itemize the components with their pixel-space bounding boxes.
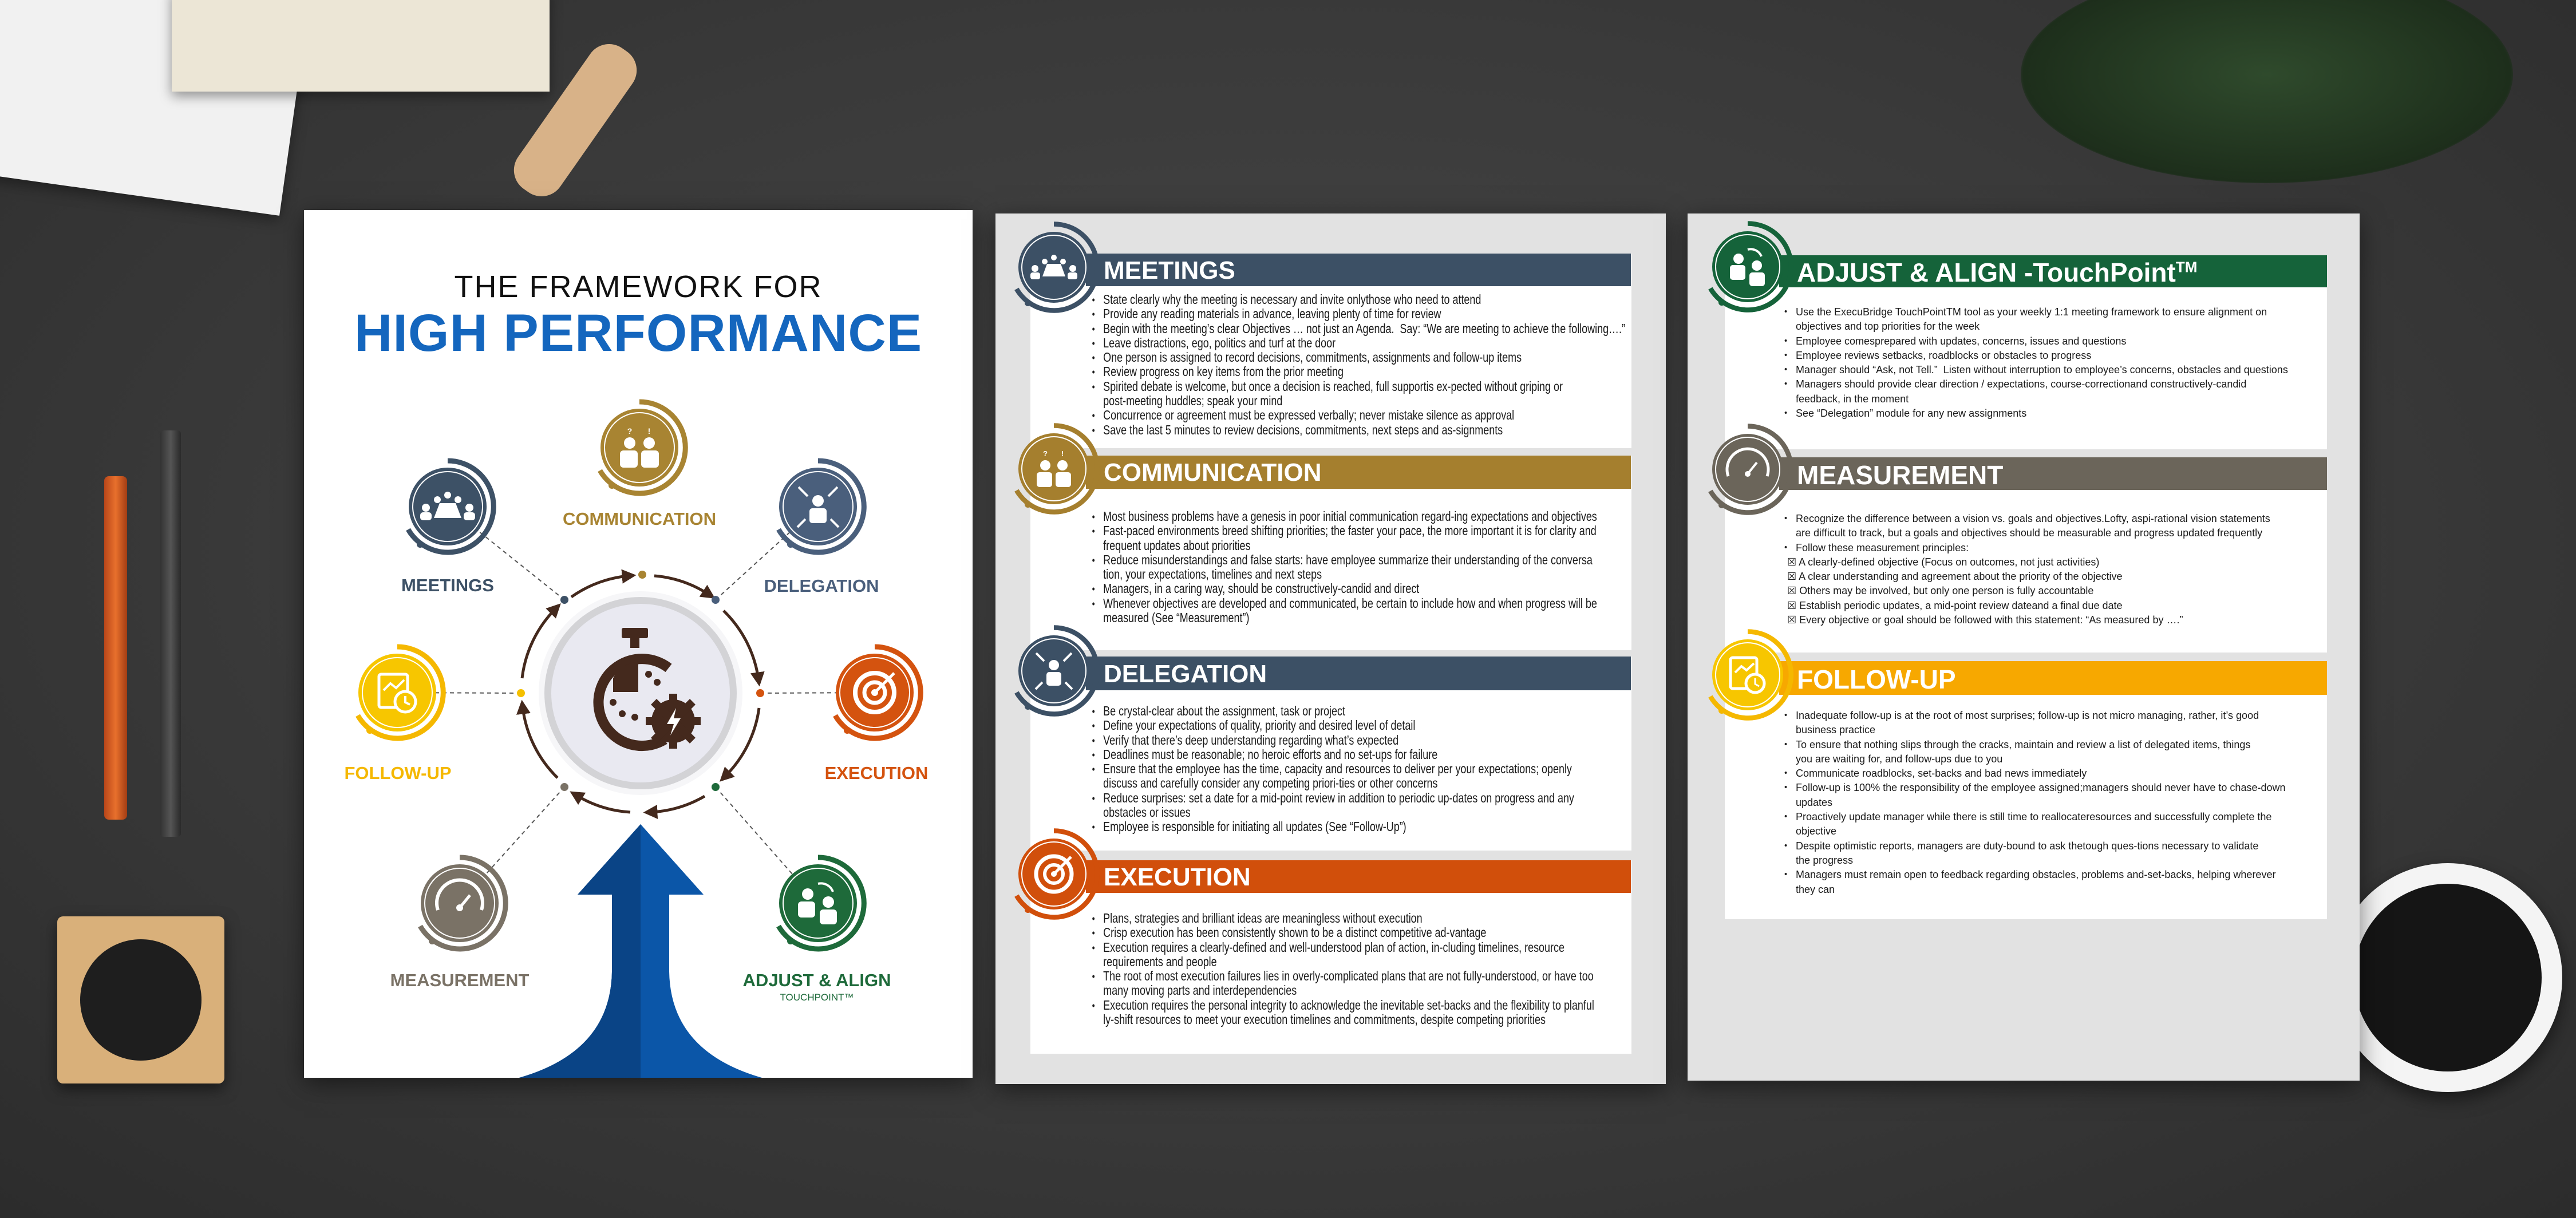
- icon: delegation: [779, 461, 864, 552]
- text: delegation bullets: Employee is responsible for initiating all updates (See “Follow-Up”): [1103, 819, 1406, 834]
- text: delegation bullets: Define your expectations of quality, priority and desired level of detail: [1103, 718, 1415, 733]
- text: meetings bullets: Spirited debate is welcome, but once a decision is reached, full supportis ex-pected without griping or: [1103, 379, 1563, 394]
- decoration: coffee cup: [2333, 863, 2562, 1092]
- icon: communication badge: !: [1061, 449, 1064, 458]
- text: measurement bullets: ☒ Others may be involved, but only one person is fully accountable: [1787, 585, 2093, 596]
- header bar: communication: COMMUNICATION: [1104, 458, 1321, 487]
- text: meetings bullets: [1092, 292, 1625, 437]
- icon: execution badge: [1014, 828, 1098, 920]
- center disc: [539, 591, 742, 795]
- label: delegation: DELEGATION: [764, 576, 879, 596]
- icon: communication: [600, 402, 685, 493]
- label: adjust & align touchpoint: [743, 970, 891, 1003]
- icon: communication: !: [648, 426, 650, 436]
- text: adjust bullets: Manager should “Ask, not Tell.” Listen without interruption to employee’s concerns, obstacles and questions: [1796, 364, 2288, 375]
- text: execution bullets: The root of most execution failures lies in overly-complicated plans that are not fully-understood, or have too: [1103, 968, 1594, 983]
- text: measurement bullets: ☒ A clearly-defined objective (Focus on outcomes, not just activities): [1787, 556, 2099, 568]
- decoration: orange pen: [104, 476, 127, 820]
- blue growth arrow: [519, 824, 762, 1078]
- icon: follow-up badge: [1708, 629, 1793, 721]
- text: adjust bullets: objectives and top priorities for the week: [1796, 321, 1980, 332]
- text: communication bullets: Reduce misunderstandings and false starts: have employee summarize their understanding of the conversa: [1103, 552, 1593, 567]
- text: meetings bullets: Provide any reading materials in advance, leaving plenty of time for review: [1103, 306, 1441, 321]
- text: meetings bullets: post-meeting huddles; speak your mind: [1103, 393, 1282, 408]
- section: follow-up: [1725, 661, 2327, 919]
- icon: follow-up: [358, 647, 443, 738]
- text: measurement bullets: ☒ Every objective or goal should be followed with this statement: “As measured by ….”: [1787, 614, 2183, 626]
- text: meetings bullets: Review progress on key items from the prior meeting: [1103, 364, 1344, 379]
- cycle arrows: [522, 576, 759, 812]
- text: execution bullets: [1092, 911, 1594, 1027]
- text: follow-up bullets: Managers must remain open to feedback regarding obstacles, problems and-set-backs, helping wherever: [1796, 869, 2275, 880]
- text: measurement bullets: ☒ A clear understanding and agreement about the priority of the objective: [1787, 571, 2123, 582]
- text: execution bullets: Plans, strategies and brilliant ideas are meaningless without execution: [1103, 911, 1423, 926]
- ring dots: [517, 571, 764, 791]
- text: meetings bullets: Leave distractions, ego, politics and turf at the door: [1103, 335, 1336, 350]
- text: follow-up bullets: the progress: [1796, 855, 1853, 866]
- icon: meetings: [408, 461, 493, 552]
- text: measurement bullets: are difficult to track, but a goals and objectives should be measurable and progress updated frequently: [1796, 527, 2262, 539]
- header bar: adjust & align: [1779, 255, 2327, 287]
- text: adjust bullets: Employee comesprepared with updates, concerns, issues and questions: [1796, 335, 2126, 347]
- header bar: execution: [1086, 860, 1631, 893]
- icon: measurement badge: [1708, 424, 1792, 515]
- panel: page 1 framework poster: [304, 210, 973, 1078]
- text: adjust bullets: feedback, in the moment: [1796, 393, 1909, 405]
- text: adjust bullets: See “Delegation” module for any new assignments: [1796, 408, 2026, 419]
- text: meetings bullets: Begin with the meeting’s clear Objectives … not just an Agenda. Say: “We are meeting to achieve the following….”: [1103, 321, 1625, 336]
- text: meetings bullets: State clearly why the meeting is necessary and invite onlythose who need to attend: [1103, 292, 1481, 307]
- text: execution bullets: many moving parts and interdependencies: [1103, 983, 1297, 998]
- header bar: execution: EXECUTION: [1104, 863, 1251, 891]
- text: communication bullets: Fast-paced environments breed shifting priorities; the faster your pace, the more important it is for clarity and: [1103, 523, 1597, 538]
- text: follow-up bullets: Communicate roadblocks, set-backs and bad news immediately: [1796, 768, 2087, 779]
- decoration: pin box: [57, 916, 224, 1083]
- text: follow-up bullets: you are waiting for, and follow-ups due to you: [1796, 753, 2002, 765]
- text: adjust bullets: [1785, 306, 2288, 419]
- label: measurement: MEASUREMENT: [390, 970, 529, 990]
- text: delegation bullets: Ensure that the employee has the time, capacity and resources to deliver per your expectations; openly: [1103, 761, 1572, 776]
- text: execution bullets: requirements and people: [1103, 954, 1217, 969]
- text: measurement bullets: [1785, 513, 2270, 626]
- text: delegation bullets: discuss and carefully consider any competing priori-ties or other concerns: [1103, 776, 1438, 790]
- text: adjust bullets: Use the ExecuBridge TouchPointTM tool as your weekly 1:1 meeting framework to ensure alignment on: [1796, 306, 2267, 318]
- text: communication bullets: Most business problems have a genesis in poor initial communication regard-ing expectations and objectives: [1103, 509, 1597, 524]
- header bar: meetings: [1086, 254, 1631, 286]
- text: follow-up bullets: [1785, 710, 2285, 895]
- text: adjust bullets: Managers should provide clear direction / expectations, course-correctionand constructively-candid: [1796, 378, 2246, 390]
- text: execution bullets: Execution requires the personal integrity to acknowledge the inevitable set-backs and the flexibility to planful: [1103, 998, 1594, 1013]
- icon: adjust and align: [779, 857, 864, 949]
- header bar: measurement: MEASUREMENT: [1797, 460, 2003, 490]
- section: execution: [1030, 860, 1631, 1054]
- diagram: [355, 400, 923, 1078]
- icon: adjust badge: [1708, 221, 1792, 313]
- header bar: follow-up: FOLLOW-UP: [1797, 665, 1956, 694]
- text: delegation bullets: [1092, 703, 1574, 834]
- text: communication bullets: Whenever objectives are developed and communicated, be certain to include how and when progress will be: [1103, 596, 1597, 611]
- text: meetings bullets: Concurrence or agreement must be expressed verbally; never mistake silence as approval: [1103, 408, 1514, 422]
- label: communication: COMMUNICATION: [563, 509, 716, 529]
- decoration: plant: [2021, 0, 2513, 183]
- text: delegation bullets: Be crystal-clear about the assignment, task or project: [1103, 703, 1345, 718]
- text: measurement bullets: Follow these measurement principles:: [1796, 542, 1969, 553]
- text: follow-up bullets: updates: [1796, 797, 1832, 808]
- decoration: pencil: [160, 430, 181, 837]
- text: follow-up bullets: Inadequate follow-up is at the root of most surprises; follow-up is not micro managing, rather, it’s good: [1796, 710, 2259, 721]
- text: communication bullets: measured (See “Measurement”): [1103, 610, 1249, 625]
- label: meetings: MEETINGS: [401, 575, 494, 595]
- text: follow-up bullets: objective: [1796, 825, 1836, 837]
- panel: page 2: [995, 213, 1666, 1084]
- text: delegation bullets: obstacles or issues: [1103, 805, 1191, 820]
- dashed connectors: [397, 507, 875, 903]
- text: follow-up bullets: business practice: [1796, 724, 1875, 735]
- decoration: wooden hand: [505, 35, 646, 205]
- text: communication bullets: [1092, 509, 1597, 625]
- text: delegation bullets: Verify that there’s deep understanding regarding what’s expected: [1103, 733, 1398, 748]
- icon: measurement: [420, 857, 505, 949]
- header bar: meetings: MEETINGS: [1104, 256, 1235, 284]
- header bar: delegation: [1086, 657, 1631, 690]
- title: the framework for: THE FRAMEWORK FOR: [455, 270, 822, 304]
- text: measurement bullets: Recognize the difference between a vision vs. goals and objectives.Lofty, aspi-rational vision statements: [1796, 513, 2270, 524]
- icon: execution: [835, 647, 920, 738]
- text: follow-up bullets: Proactively update manager while there is still time to reallocateresources and successfully complete the: [1796, 811, 2271, 822]
- section: measurement: [1725, 457, 2327, 652]
- header bar: measurement: [1779, 457, 2327, 490]
- text: execution bullets: ly-shift resources to meet your execution timelines and commitments, despite competing priorities: [1103, 1012, 1546, 1027]
- text: follow-up bullets: they can: [1796, 884, 1835, 895]
- decoration: notebook: [172, 0, 550, 92]
- text: communication bullets: Managers, in a caring way, should be constructively-candid and direct: [1103, 581, 1419, 596]
- header bar: communication: [1086, 456, 1631, 489]
- icon: meetings badge: [1014, 222, 1098, 313]
- label: execution: EXECUTION: [825, 763, 928, 783]
- text: delegation bullets: Deadlines must be reasonable; no heroic efforts and no set-ups for failure: [1103, 747, 1437, 762]
- text: follow-up bullets: Despite optimistic reports, managers are duty-bound to ask thetough ques-tions necessary to validate: [1796, 840, 2258, 852]
- header bar: adjust & align: ADJUST & ALIGN -TouchPointTM: [1797, 258, 2197, 287]
- text: communication bullets: frequent updates about priorities: [1103, 538, 1250, 553]
- label: adjust & align touchpoint: TOUCHPOINT™: [780, 992, 854, 1003]
- icon: communication: ?: [627, 426, 632, 436]
- header bar: delegation: DELEGATION: [1104, 660, 1267, 688]
- text: execution bullets: Crisp execution has been consistently shown to be a distinct competitive ad-vantage: [1103, 925, 1486, 940]
- panel: page 3: [1688, 213, 2360, 1081]
- text: follow-up bullets: To ensure that nothing slips through the cracks, maintain and review a list of delegated items, things: [1796, 739, 2250, 750]
- text: adjust bullets: Employee reviews setbacks, roadblocks or obstacles to progress: [1796, 350, 2091, 361]
- icon: stopwatch with gear: [598, 628, 701, 749]
- section: delegation: [1030, 657, 1631, 851]
- section: meetings: [1030, 254, 1631, 448]
- icon: delegation badge: [1014, 625, 1097, 717]
- text: meetings bullets: One person is assigned to record decisions, commitments, assignments and follow-up items: [1103, 350, 1522, 365]
- header bar: follow-up: [1779, 661, 2327, 695]
- icon: communication badge: [1014, 423, 1098, 515]
- text: execution bullets: Execution requires a clearly-defined and well-understood plan of action, in-cluding timelines, resource: [1103, 940, 1564, 955]
- text: meetings bullets: Save the last 5 minutes to review decisions, commitments, next steps and as-signments: [1103, 422, 1503, 437]
- icon: communication badge: ?: [1043, 449, 1048, 458]
- decoration: papers: [0, 0, 313, 216]
- label: adjust & align touchpoint: ADJUST & ALIGN: [743, 970, 891, 990]
- text: delegation bullets: Reduce surprises: set a date for a mid-point review in addition to periodic up-dates on progress and any: [1103, 790, 1574, 805]
- title: high performance: HIGH PERFORMANCE: [354, 304, 922, 362]
- text: communication bullets: tion, your expectations, timelines and next steps: [1103, 567, 1322, 582]
- text: measurement bullets: ☒ Establish periodic updates, a mid-point review dateand a final due date: [1787, 600, 2123, 611]
- label: follow-up: FOLLOW-UP: [344, 763, 452, 783]
- text: follow-up bullets: Follow-up is 100% the responsibility of the employee assigned;managers should never have to chase-down: [1796, 782, 2285, 793]
- section: adjust & align: [1725, 255, 2327, 449]
- section: communication: [1030, 456, 1631, 650]
